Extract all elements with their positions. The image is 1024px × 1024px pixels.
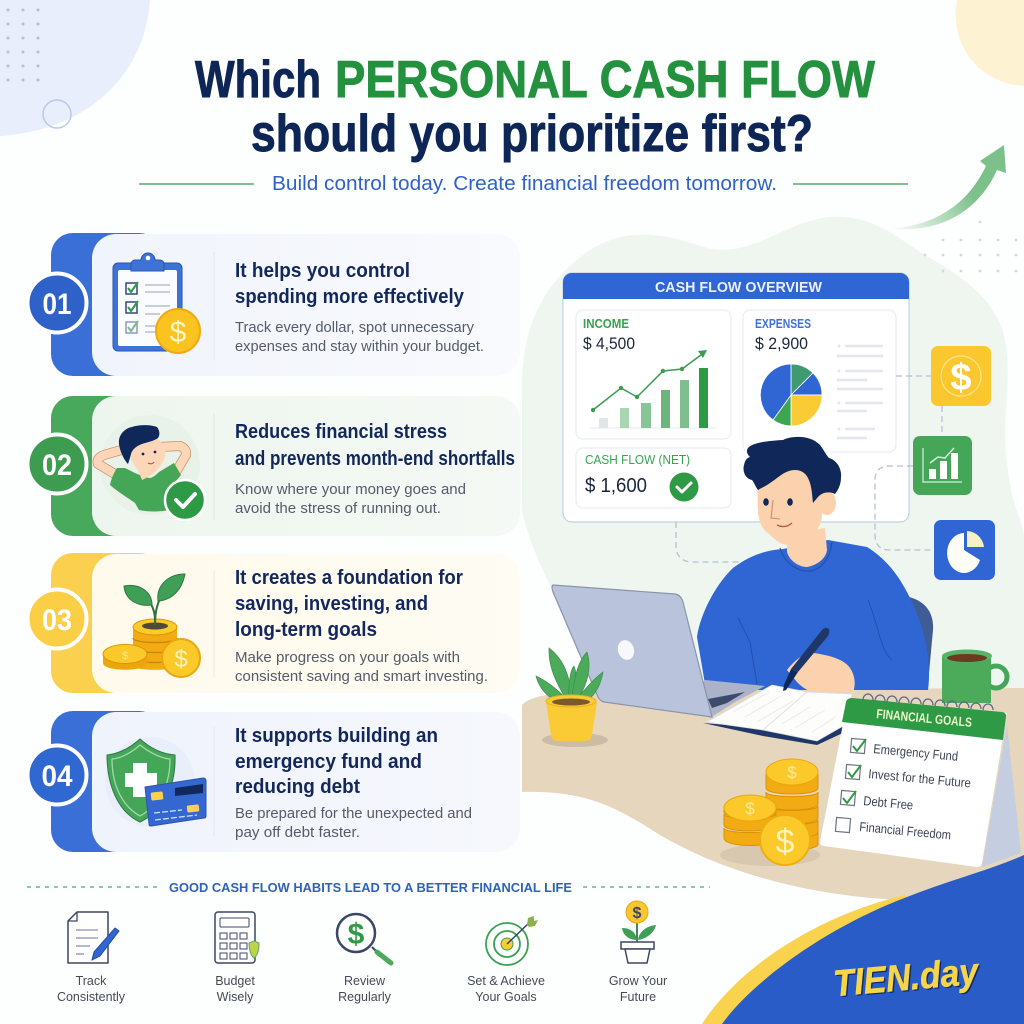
panel: card 02 (28, 396, 520, 536)
icon: relaxed person (98, 415, 205, 520)
background: green blob (522, 217, 1024, 720)
title: should you prioritize first? (251, 105, 813, 163)
text: card 03 description (235, 650, 488, 685)
habit: track consistently (57, 912, 126, 1004)
panel: card 01 (28, 233, 520, 376)
text: card 01 description: Track every dollar, spot unnecessary (235, 320, 475, 336)
panel: cash flow overview dashboard (563, 273, 909, 522)
text: card 02 heading: and prevents month-end shortfalls (235, 447, 515, 470)
habit: track consistently: Consistently (57, 990, 126, 1004)
arrow: upward growth (896, 145, 1006, 229)
subtitle: Build control today. Create financial freedom tomorrow. (272, 172, 777, 195)
habit: set and achieve your goals: Set & Achieve (467, 974, 545, 988)
chair (905, 596, 933, 684)
coffee mug (942, 650, 1007, 703)
number badge 03: 03 (42, 604, 72, 637)
face (757, 465, 824, 545)
coin stacks: $ (745, 799, 755, 818)
neck (787, 528, 827, 567)
text: card 03 description: consistent saving and smart investing. (235, 669, 488, 685)
panel: card 04 (28, 711, 520, 852)
coin stacks (720, 759, 820, 866)
sweater (697, 540, 929, 690)
title (195, 51, 876, 163)
number badge 04 (28, 746, 86, 804)
text: card 01 description: expenses and stay within your budget. (235, 339, 484, 355)
habit: track consistently: Track (76, 974, 107, 988)
habit: review regularly: $ (348, 918, 365, 951)
person at desk (697, 437, 929, 690)
habit: review regularly: Regularly (338, 990, 392, 1004)
footer heading: GOOD CASH FLOW HABITS LEAD TO A BETTER FINANCIAL LIFE (169, 880, 572, 895)
goal list: Emergency Fund (873, 741, 959, 764)
background: dots (924, 221, 1017, 272)
number badge 01: 01 (42, 288, 72, 321)
icon: yellow dollar tile (931, 346, 991, 406)
habit: grow your future (609, 901, 667, 1004)
text: card 01 heading (235, 259, 465, 308)
text: card 04 description: pay off debt faster. (235, 825, 360, 841)
desk (522, 688, 1024, 900)
text: card 04 heading: emergency fund and (235, 750, 422, 773)
habit: set and achieve your goals (467, 916, 545, 1004)
goal list (835, 738, 972, 842)
habit: review regularly: Review (344, 974, 386, 988)
number badge 03 (28, 590, 86, 648)
icon: shield and credit card (105, 737, 206, 827)
text: card 03 heading: saving, investing, and (235, 592, 428, 615)
income card: $ 4,500 (583, 334, 635, 353)
coin stacks: $ (787, 763, 797, 782)
expenses card: EXPENSES (755, 317, 811, 331)
goal list: Debt Free (863, 793, 914, 813)
open notebook (703, 685, 852, 745)
text: card 01 heading: It helps you control (235, 259, 410, 282)
expenses card (743, 310, 896, 452)
text: card 01 description (235, 320, 484, 355)
habit: budget wisely: Budget (215, 974, 255, 988)
icon: clipboard with coin: $ (170, 316, 187, 349)
habit: set and achieve your goals: Your Goals (475, 990, 537, 1004)
text: card 02 heading: Reduces financial stress (235, 420, 447, 443)
ear (818, 491, 836, 515)
dashboard title: CASH FLOW OVERVIEW (655, 280, 822, 296)
net cash flow card: CASH FLOW (NET) (585, 453, 690, 467)
title: Which (195, 51, 321, 109)
number badge 02 (28, 434, 86, 494)
text: card 02 heading (235, 420, 515, 470)
text: card 02 description: Know where your money goes and (235, 482, 466, 498)
calendar title: FINANCIAL GOALS (876, 706, 973, 730)
habit: grow your future: $ (633, 905, 642, 922)
number badge 04: 04 (42, 760, 73, 793)
goal list: Financial Freedom (859, 819, 952, 842)
panel: card 03 (28, 553, 520, 693)
icon: clipboard with coin (113, 253, 200, 353)
laptop (552, 585, 765, 718)
hair (743, 437, 841, 503)
habit: budget wisely (215, 912, 259, 1004)
corner: blue brand panel (722, 855, 1024, 1024)
text: card 04 heading (235, 724, 438, 798)
text: card 03 heading: It creates a foundation for (235, 566, 463, 589)
habit: budget wisely: Wisely (217, 990, 254, 1004)
text: card 02 description (235, 482, 466, 517)
number badge 01 (28, 274, 86, 332)
potted plant (536, 648, 608, 747)
text: card 03 heading (235, 566, 463, 641)
title: PERSONAL CASH FLOW (335, 51, 876, 109)
text: card 03 description: Make progress on your goals with (235, 650, 460, 666)
icon: sprout on coins: $ (122, 650, 128, 662)
habit: grow your future: Future (620, 990, 656, 1004)
text: card 04 heading: It supports building an (235, 724, 438, 747)
calendar rings (863, 694, 993, 710)
connector lines (676, 376, 942, 562)
icon: green chart tile (913, 436, 972, 495)
income card (576, 310, 731, 439)
coin stacks: $ (776, 823, 795, 861)
logo: TIEN.day (832, 951, 982, 1004)
number badge 02: 02 (42, 449, 72, 482)
logo: TIEN.day (833, 952, 984, 1006)
hand with pen (783, 628, 855, 692)
icon: blue pie tile (934, 520, 995, 580)
text: card 02 description: avoid the stress of running out. (235, 501, 441, 517)
net cash flow card: $ 1,600 (585, 475, 647, 497)
background: top-right yellow blob (956, 0, 1024, 86)
corner: yellow accent (702, 895, 1024, 1024)
icon: sprout on coins (103, 574, 200, 677)
habit: grow your future: Grow Your (609, 974, 667, 988)
habit: review regularly (337, 914, 392, 1004)
text: card 01 heading: spending more effectively (235, 285, 465, 308)
text: card 04 description (235, 806, 472, 841)
goal list: Invest for the Future (868, 766, 972, 791)
icon: sprout on coins: $ (174, 646, 188, 673)
expenses card: $ 2,900 (755, 334, 808, 353)
text: card 04 description: Be prepared for the unexpected and (235, 806, 472, 822)
income card: INCOME (583, 317, 629, 331)
text: card 04 heading: reducing debt (235, 775, 360, 798)
icon: yellow dollar tile: $ (950, 357, 972, 399)
background: top-left blue blob (0, 0, 150, 136)
text: card 03 heading: long-term goals (235, 618, 377, 641)
desk calendar: financial goals (820, 694, 1021, 867)
pie chart (760, 364, 822, 426)
net cash flow card (576, 448, 731, 508)
